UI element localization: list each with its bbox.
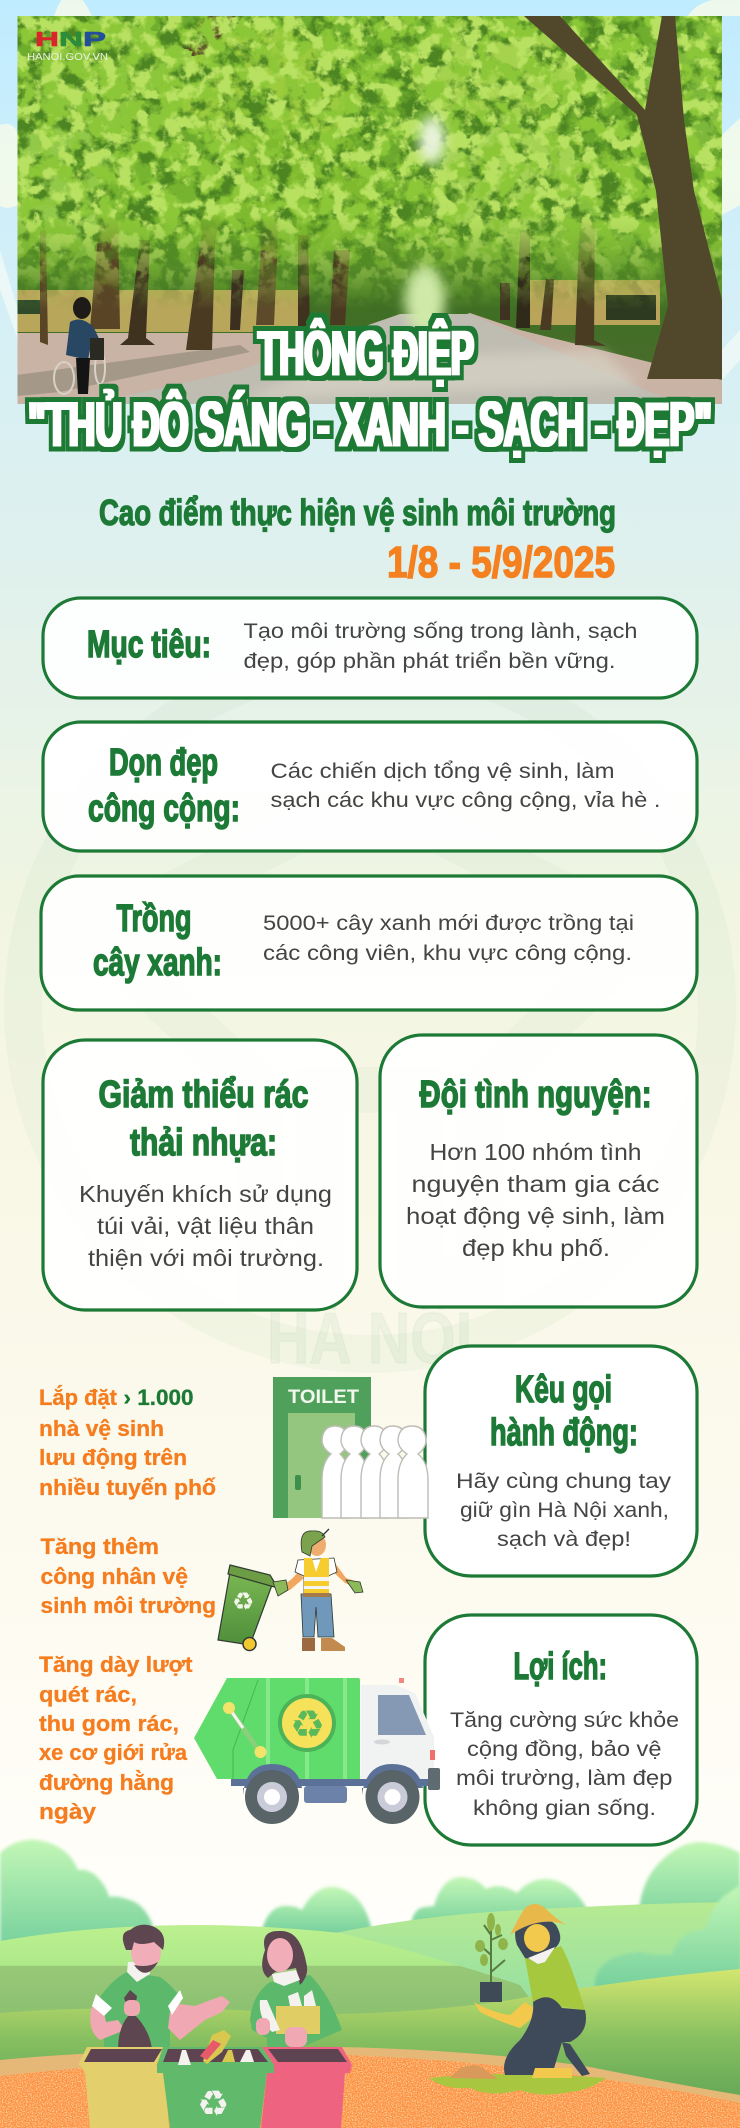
back bushes bbox=[0, 1840, 740, 1950]
panel: Trồng cây xanh: cây xanh: bbox=[93, 942, 222, 984]
illustration: woman planting tree bbox=[429, 1904, 606, 2095]
illustration: recycling bins: ♻ bbox=[197, 2084, 229, 2125]
foliage canopy bbox=[0, 16, 740, 316]
cyclist bbox=[54, 297, 105, 394]
text: more workers: sinh môi trường bbox=[40, 1593, 216, 1618]
panel: Đội tình nguyện: hoạt động vệ sinh, làm bbox=[406, 1203, 665, 1229]
panel: Mục tiêu: đẹp, góp phần phát triển bền vững. bbox=[244, 650, 616, 673]
panel: Giảm thiểu rác thải nhựa: Khuyến khích sử dụng bbox=[79, 1181, 332, 1207]
text: portable toilets: › 1.000 bbox=[124, 1385, 194, 1410]
panel: Đội tình nguyện: nguyện tham gia các bbox=[412, 1171, 660, 1197]
right hill bbox=[320, 1902, 740, 2000]
panel: Lợi ích: không gian sống. bbox=[473, 1797, 656, 1820]
text: more sweeping: thu gom rác, bbox=[39, 1711, 179, 1736]
panel: Mục tiêu bbox=[43, 598, 697, 698]
logo: HNP bbox=[27, 29, 108, 63]
watermark: Hanoi emblem bbox=[23, 660, 717, 1379]
panel: Đội tình nguyện: Đội tình nguyện: bbox=[420, 1074, 652, 1116]
icon: garbage truck bbox=[194, 1678, 440, 1824]
panel: Dọn đẹp công cộng: sạch các khu vực công cộng, vỉa hè . bbox=[270, 789, 660, 812]
icon: toilet with queue: TOILET bbox=[288, 1387, 359, 1408]
panel: Kêu gọi hành động: sạch và đẹp! bbox=[497, 1528, 631, 1551]
text: portable toilets: lưu động trên bbox=[39, 1445, 187, 1470]
illustration: man with trash bag bbox=[90, 1925, 230, 2050]
logo: HNP: N bbox=[59, 29, 83, 51]
panel: Dọn đẹp công cộng: Dọn đẹp bbox=[109, 742, 218, 784]
lower tree trunks bbox=[40, 16, 606, 350]
panel: Lợi ích: cộng đồng, bảo vệ bbox=[467, 1738, 662, 1761]
text: more sweeping: ngày bbox=[39, 1799, 97, 1824]
panel: Lợi ích bbox=[425, 1615, 697, 1845]
icon: sanitation worker with bin bbox=[218, 1529, 363, 1651]
panel: Giảm thiểu rác thải nhựa bbox=[43, 1040, 357, 1310]
panel: Kêu gọi hành động: Kêu gọi bbox=[515, 1369, 612, 1411]
left hill bbox=[0, 1925, 560, 2040]
big right tree bbox=[524, 16, 722, 379]
panel: Kêu gọi hành động bbox=[425, 1346, 697, 1576]
watermark: Hanoi emblem: HÀ NỘI bbox=[267, 1298, 472, 1379]
panel: Đội tình nguyện: Hơn 100 nhóm tình bbox=[430, 1139, 642, 1165]
ground bbox=[17, 313, 722, 404]
panel: Lợi ích: Lợi ích: bbox=[514, 1646, 607, 1688]
path bbox=[0, 2047, 740, 2128]
panel: Lợi ích: môi trường, làm đẹp bbox=[456, 1767, 672, 1790]
text: more sweeping: đường hằng bbox=[39, 1770, 174, 1795]
text: portable toilets: nhiều tuyến phố bbox=[39, 1475, 216, 1500]
logo: HNP: P bbox=[83, 29, 106, 51]
panel: Giảm thiểu rác thải nhựa: túi vải, vật liệu thân bbox=[97, 1213, 314, 1239]
back walls bbox=[17, 290, 307, 332]
text: more workers: Tăng thêm bbox=[40, 1534, 159, 1559]
panel: Mục tiêu: Mục tiêu: bbox=[87, 624, 211, 666]
illustration: recycling bins bbox=[78, 2030, 352, 2128]
text: more sweeping: xe cơ giới rửa bbox=[39, 1740, 188, 1765]
panel: Mục tiêu: Tạo môi trường sống trong lành, sạch bbox=[244, 620, 638, 643]
front hill bbox=[0, 1969, 740, 2110]
sky glow bbox=[419, 116, 445, 164]
text: more sweeping: quét rác, bbox=[39, 1682, 137, 1707]
text: portable toilets bbox=[39, 1385, 216, 1500]
panel: Trồng cây xanh: Trồng bbox=[116, 898, 192, 940]
text: portable toilets: nhà vệ sinh bbox=[39, 1416, 164, 1441]
icon: garbage truck: ♻ bbox=[290, 1703, 325, 1748]
panel: Lợi ích: Tăng cường sức khỏe bbox=[450, 1709, 679, 1732]
panel: Giảm thiểu rác thải nhựa: thiện với môi trường. bbox=[88, 1245, 324, 1271]
logo: HNP: H bbox=[35, 29, 59, 51]
title bbox=[28, 318, 712, 460]
decorative corner clouds bbox=[0, 0, 740, 380]
text: more workers bbox=[40, 1534, 216, 1618]
text: more workers: công nhân vệ bbox=[40, 1564, 188, 1589]
panel: Dọn đẹp công cộng: công cộng: bbox=[88, 788, 240, 830]
panel: Kêu gọi hành động: Hãy cùng chung tay bbox=[456, 1470, 672, 1493]
panel: Trồng cây xanh bbox=[41, 876, 697, 1010]
illustration: woman with bottles bbox=[250, 1931, 342, 2048]
right foreground bushes bbox=[595, 1885, 740, 1990]
orange ground bbox=[0, 2055, 740, 2128]
panel: Kêu gọi hành động: giữ gìn Hà Nội xanh, bbox=[460, 1499, 669, 1522]
panel: Dọn đẹp công cộng bbox=[43, 722, 697, 851]
panel: Trồng cây xanh: các công viên, khu vực công cộng. bbox=[263, 942, 632, 965]
title: THÔNG ĐIỆP bbox=[258, 318, 474, 389]
panel: Giảm thiểu rác thải nhựa: thải nhựa: bbox=[130, 1122, 277, 1164]
logo: HNP: HANOI.GOV.VN bbox=[27, 52, 108, 63]
text: more sweeping bbox=[39, 1652, 193, 1824]
panel: Giảm thiểu rác thải nhựa: Giảm thiểu rác bbox=[98, 1074, 308, 1116]
text: more sweeping: Tăng dày lượt bbox=[39, 1652, 193, 1677]
illustration: landscape bbox=[0, 1840, 740, 2128]
hero photo: tree-lined street bbox=[0, 16, 740, 404]
panel: Kêu gọi hành động: hành động: bbox=[490, 1412, 638, 1454]
panel: Đội tình nguyện: đẹp khu phố. bbox=[462, 1235, 610, 1261]
panel: Dọn đẹp công cộng: Các chiến dịch tổng vệ sinh, làm bbox=[270, 760, 614, 783]
icon: toilet with queue bbox=[273, 1377, 428, 1518]
panel: Đội tình nguyện bbox=[380, 1035, 697, 1307]
text: portable toilets: Lắp đặt bbox=[39, 1385, 118, 1410]
date: 1/8 - 5/9/2025 bbox=[387, 538, 615, 587]
panel: Trồng cây xanh: 5000+ cây xanh mới được trồng tại bbox=[263, 912, 634, 935]
icon: sanitation worker with bin: ♻ bbox=[232, 1587, 254, 1616]
